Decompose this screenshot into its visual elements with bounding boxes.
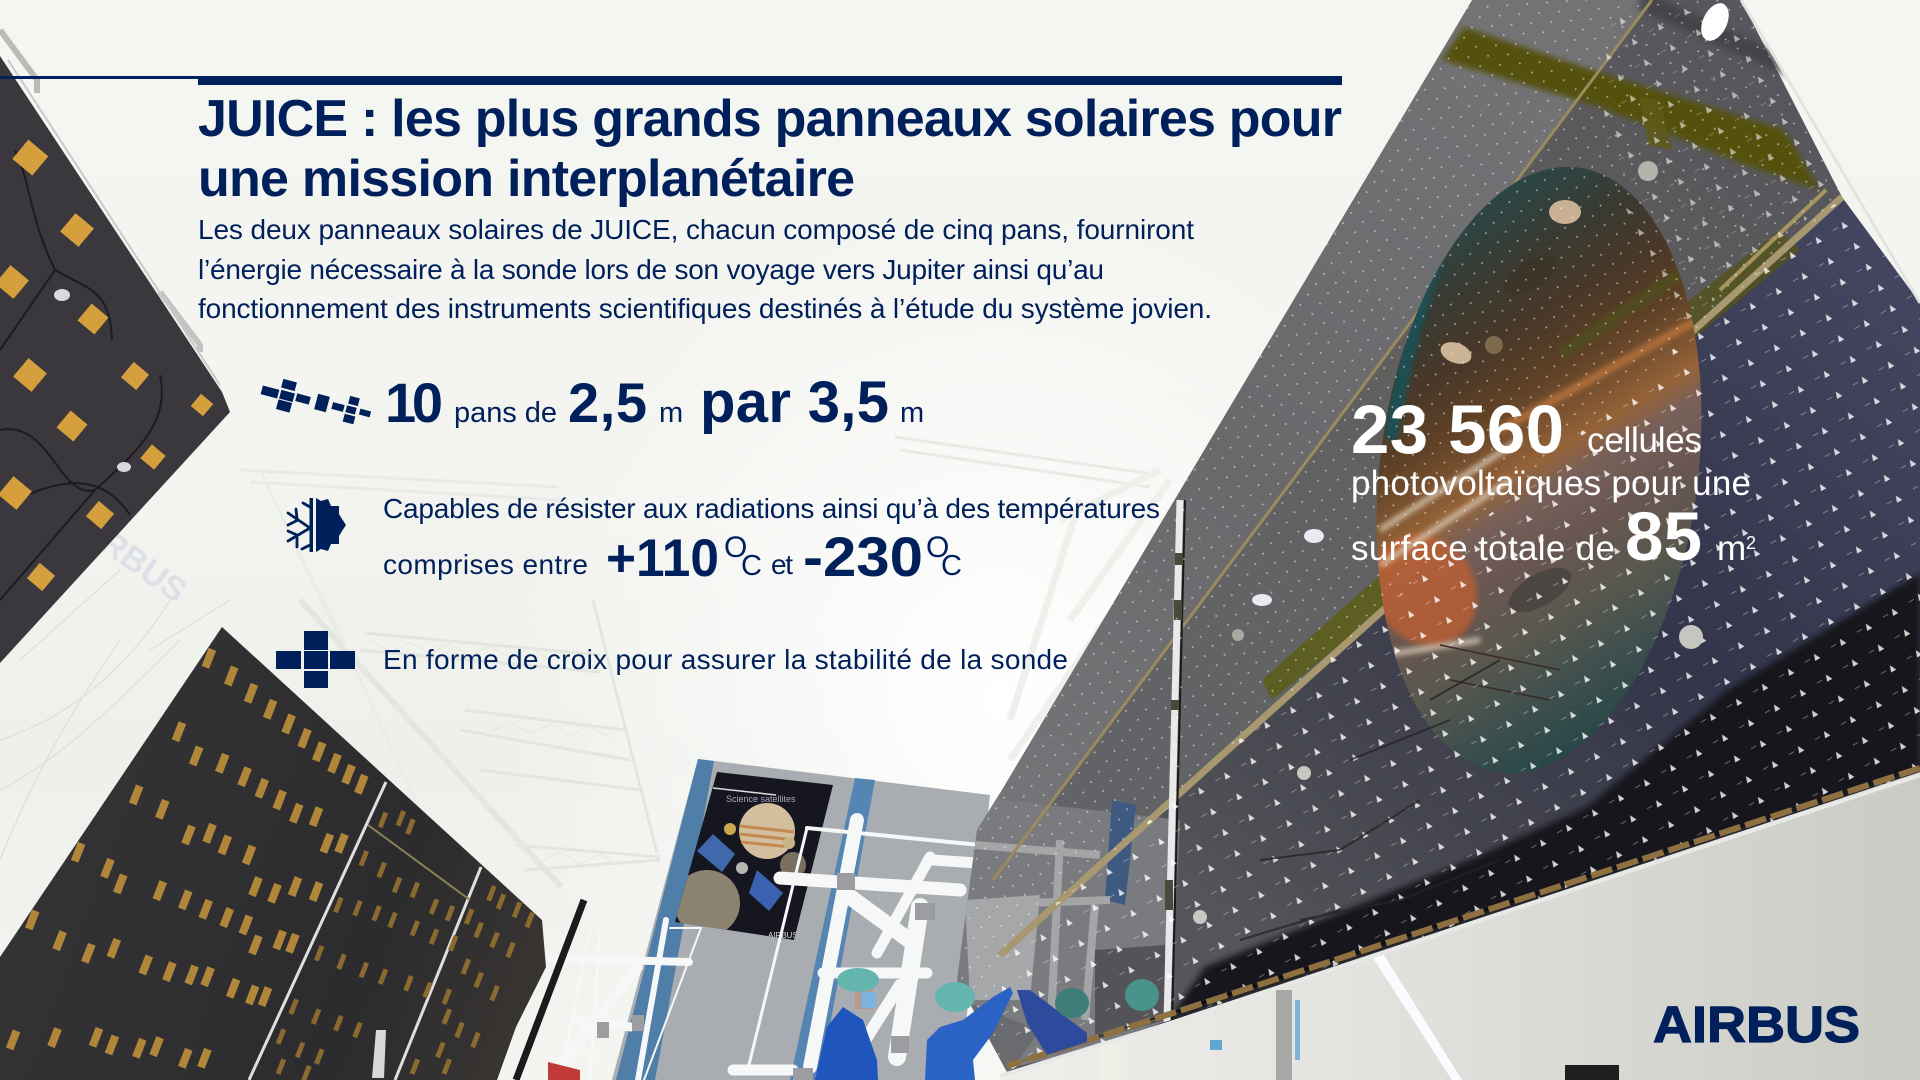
intro paragraph: fonctionnement des instruments scientifiques destinés à l’étude du système jovien. [198,293,1212,324]
poster: science satellites: AIRBUS [768,931,798,940]
title [198,90,1342,208]
dark reflection along bottom edge [1167,573,1920,1022]
title: JUICE : les plus grands panneaux solaires pour [198,90,1342,148]
stat: panel count and dimensions: pans de [454,397,557,429]
icon: snowflake and sun [288,498,346,552]
stat: photovoltaic cells and surface: photovoltaïques pour une [1351,464,1751,503]
intro paragraph: Les deux panneaux solaires de JUICE, chacun composé de cinq pans, fourniront [198,214,1194,245]
panel details: bolts, highlights and bottom rim [1000,0,1920,1076]
ghosted ceiling trusses [0,437,1170,900]
stat: photovoltaic cells and surface: 2 [1746,533,1756,553]
solar cell contact dots [950,0,1920,1080]
stat: photovoltaic cells and surface: surface totale de [1351,529,1615,568]
stat: photovoltaic cells and surface: 85 [1625,498,1702,575]
stat: photovoltaic cells and surface [1351,391,1756,575]
tan panel seams [993,0,1652,880]
olive reflection bands [1442,27,1820,190]
stat: panel count and dimensions: 10 [385,371,443,434]
stat: panel count and dimensions: m [659,397,683,429]
frame joints [548,873,935,1080]
text: radiation and temperature resistance: et [771,549,793,580]
arm and head reflections [1017,979,1159,1055]
icon: cross shape [276,631,355,688]
stat: panel count and dimensions [385,370,924,435]
stat: panel count and dimensions: par 3,5 [700,370,889,435]
text: radiation and temperature resistance [383,493,1160,588]
black support rod [516,900,584,1080]
text: radiation and temperature resistance: O [926,531,949,564]
logo: Airbus: AIRBUS [1653,996,1860,1053]
white hinge between panels [1167,500,1185,1022]
stat: panel count and dimensions: 2,5 [568,371,647,434]
technician left [815,968,879,1080]
text: radiation and temperature resistance: comprises entre [383,549,588,580]
Jupiter overlay [1376,166,1702,773]
large solar panel, foreground right [950,0,1920,1080]
text: radiation and temperature resistance: Capables de résister aux radiations ainsi qu’à des températures [383,493,1160,524]
top rule [0,76,1342,85]
technicians [815,968,1159,1080]
wall and floor below large panel [1000,772,1920,1080]
poster: science satellites [674,772,833,940]
stat: photovoltaic cells and surface: cellules [1587,421,1702,460]
text: radiation and temperature resistance: C [941,550,962,582]
white ground support frame [548,820,980,1080]
photo watermark: Airbus lettering on wall: AIRBUS [66,503,194,610]
upper left solar panel [0,30,230,663]
stat: photovoltaic cells and surface: m [1717,529,1746,568]
text: radiation and temperature resistance: -230 [803,525,923,588]
technician right [925,982,1013,1080]
text: radiation and temperature resistance: +110 [606,529,719,588]
stat: photovoltaic cells and surface: 23 560 [1351,391,1564,468]
lower left reflection of wall and frame [960,795,1180,1080]
stat: panel count and dimensions: m [900,397,924,429]
text: cross configuration: En forme de croix pour assurer la stabilité de la sonde [383,644,1068,675]
gold connectors [10,649,365,1067]
lower left solar panels [0,627,546,1080]
intro paragraph: l’énergie nécessaire à la sonde lors de son voyage vers Jupiter ainsi qu’au [198,254,1104,285]
text: radiation and temperature resistance: C [741,550,762,582]
icon: satellite [261,379,371,424]
panel seams [249,782,481,1080]
text: radiation and temperature resistance: O [724,531,747,564]
back wall with poster [612,759,990,1080]
poster: science satellites: Science satellites [726,794,796,804]
title: une mission interplanétaire [198,150,855,208]
intro paragraph [198,214,1212,324]
